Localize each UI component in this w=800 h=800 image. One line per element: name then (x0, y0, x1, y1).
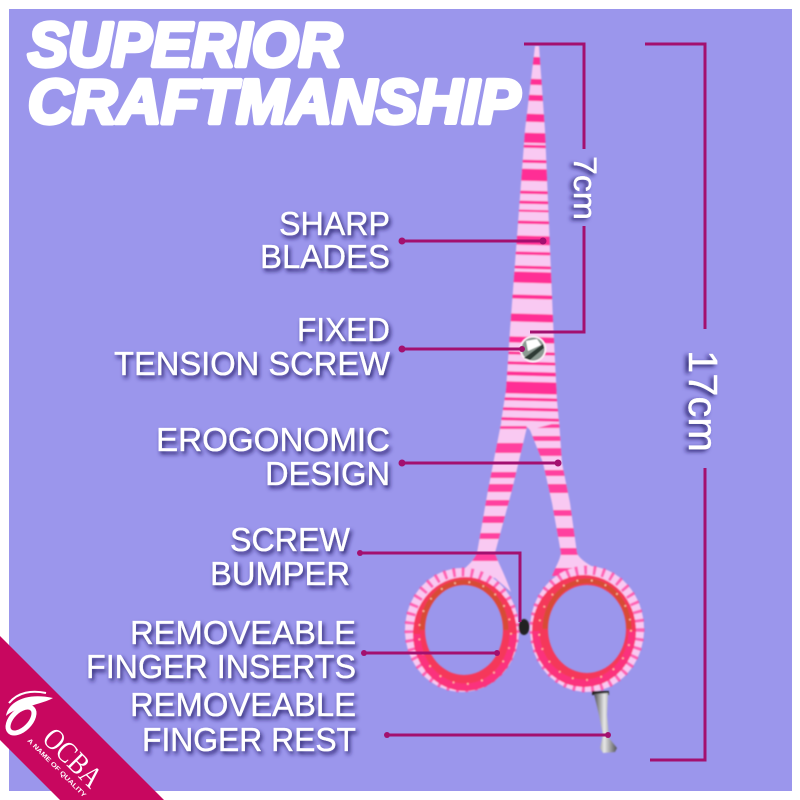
left finger ring (405, 568, 519, 692)
callout: removeable finger rest: FINGER REST (142, 721, 356, 758)
scissors illustration (405, 40, 644, 753)
callout: removeable finger inserts (86, 614, 500, 685)
callout: screw bumper: BUMPER (210, 555, 350, 592)
right handle (530, 421, 592, 577)
brand logo: A NAME OF QUALITY (26, 737, 88, 800)
dimension: 17cm total length (645, 44, 726, 760)
callout: removeable finger inserts: REMOVEABLE (130, 614, 356, 651)
dimension: 17cm total length: 17cm (680, 350, 726, 452)
callout: sharp blades (260, 205, 546, 275)
callout: fixed tension screw (114, 311, 525, 382)
right finger ring (530, 566, 644, 692)
callout: fixed tension screw: FIXED (297, 311, 390, 348)
blade (500, 46, 560, 429)
title: CRAFTMANSHIP (28, 68, 521, 137)
callout: removeable finger rest: REMOVEABLE (130, 686, 356, 723)
brand logo (3, 692, 109, 800)
dimension: 7cm blade length: 7cm (567, 156, 603, 220)
callout: ergonomic design: DESIGN (265, 455, 390, 492)
logo ribbon (0, 636, 164, 800)
callout: sharp blades: BLADES (260, 238, 390, 275)
left handle (464, 421, 528, 592)
tension screw (520, 336, 546, 362)
callout: fixed tension screw: TENSION SCREW (114, 345, 391, 382)
title (28, 11, 521, 137)
callout: sharp blades: SHARP (279, 205, 390, 242)
finger rest (592, 691, 617, 753)
callout: screw bumper (210, 521, 520, 622)
callout: removeable finger inserts: FINGER INSERTS (86, 648, 356, 685)
callout: ergonomic design: EROGONOMIC (156, 421, 390, 458)
callout: ergonomic design (156, 421, 562, 492)
dimension: 7cm blade length (524, 44, 603, 332)
callout: removeable finger rest (130, 686, 611, 758)
screw bumper (518, 619, 530, 635)
title: SUPERIOR (28, 11, 342, 80)
callout: screw bumper: SCREW (230, 521, 351, 558)
